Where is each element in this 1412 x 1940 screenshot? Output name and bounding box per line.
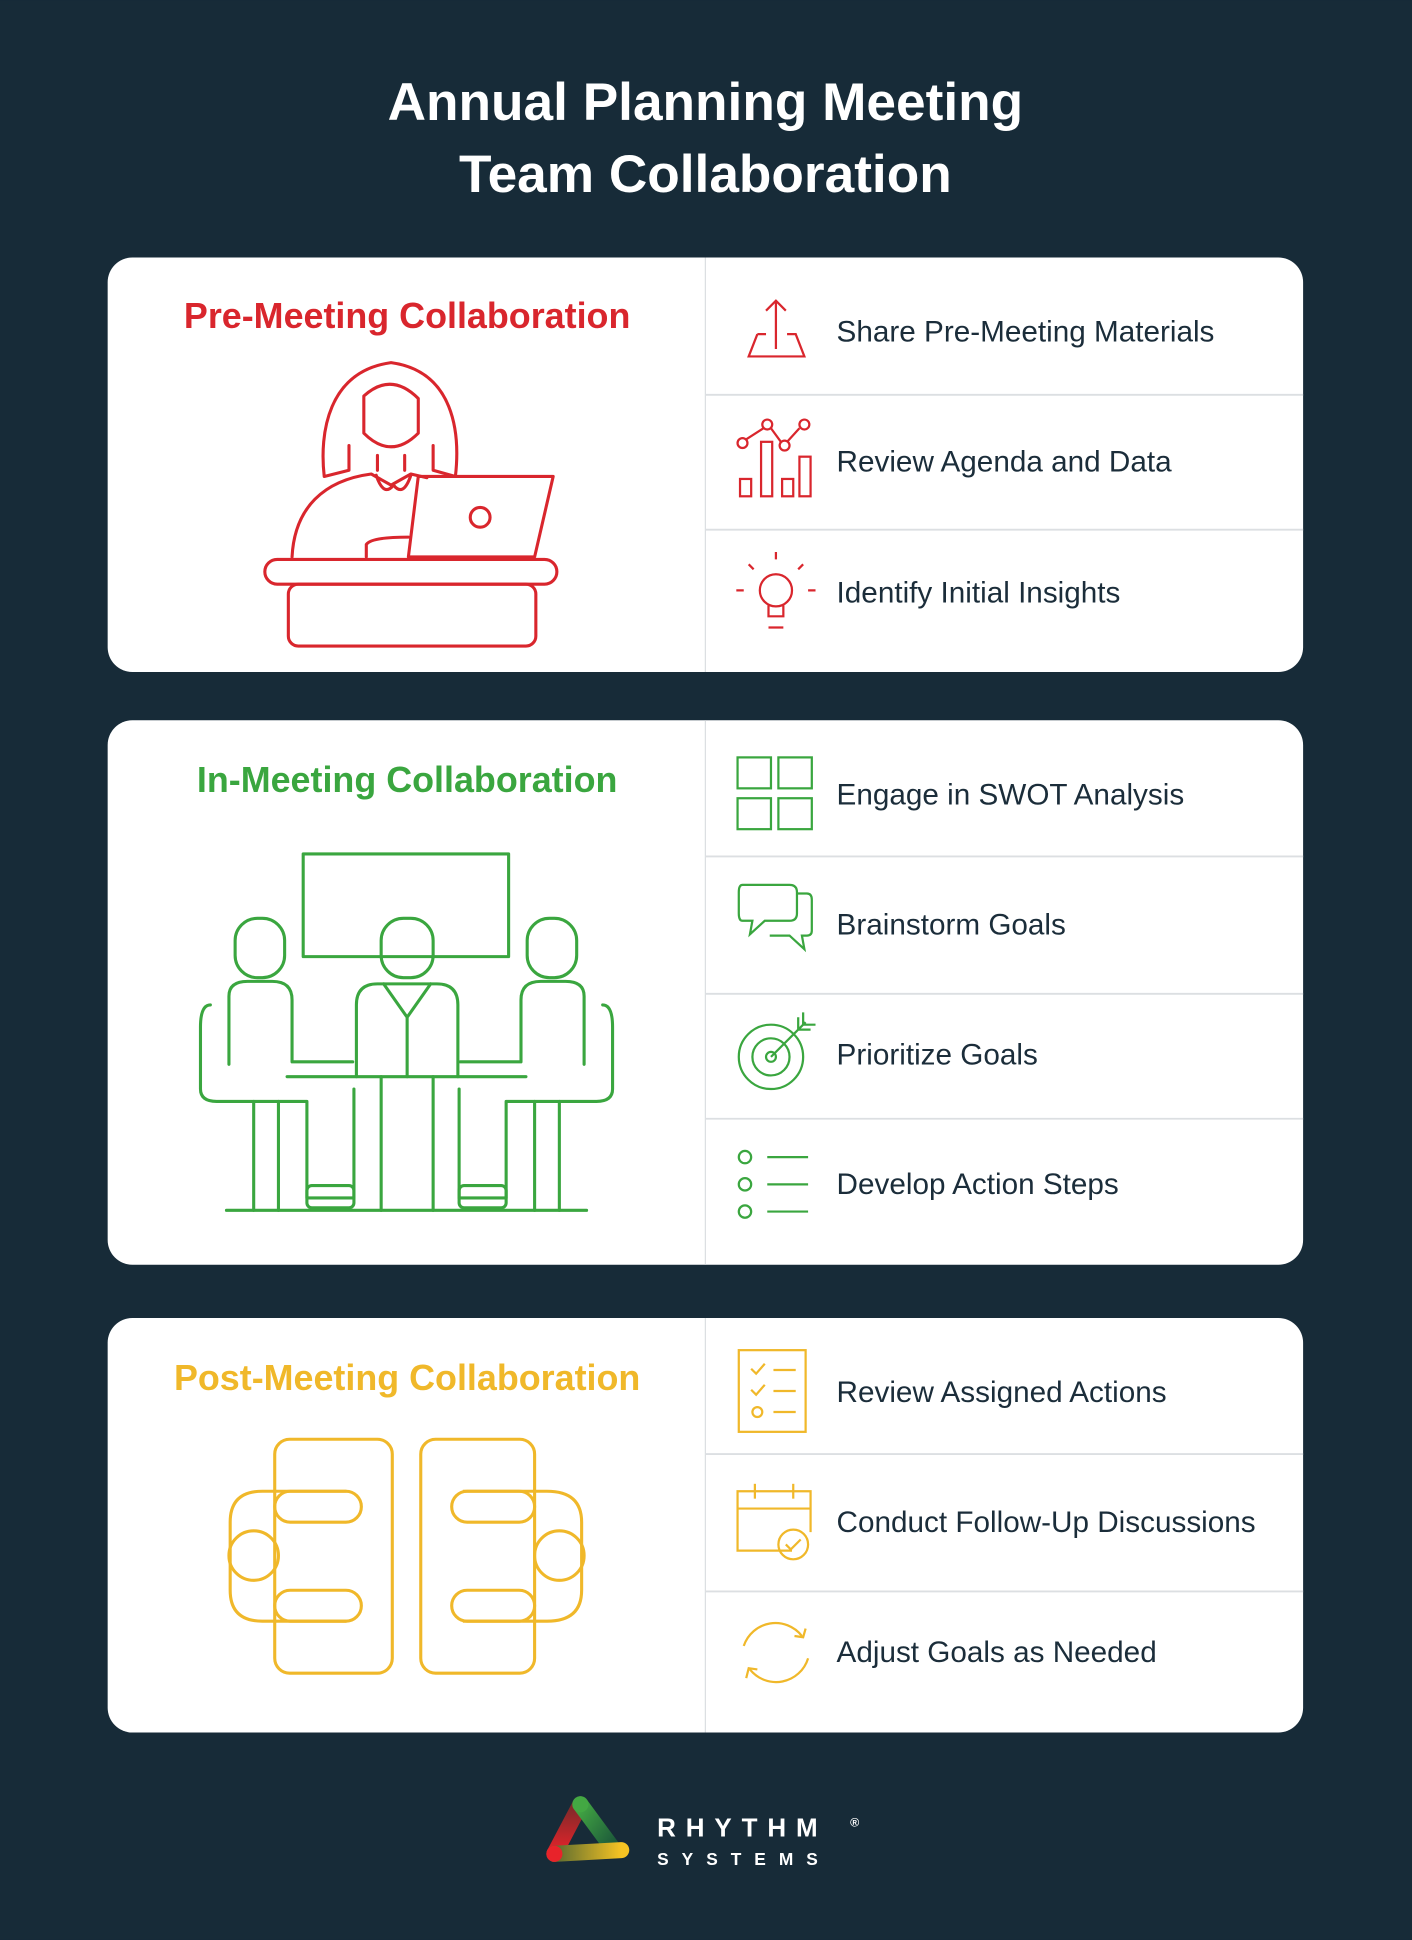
heading: post-meeting: Post-Meeting Collaboration [174,1358,640,1398]
item: action steps [739,1151,1119,1218]
item: follow-up [738,1484,1256,1559]
item: review actions: Review Assigned Actions [837,1376,1167,1409]
logo [546,1796,859,1869]
illustration: two devices / connection [229,1439,584,1673]
panel: pre-meeting [108,257,1303,672]
item: brainstorm: Brainstorm Goals [837,908,1066,941]
logo: RHYTHM [657,1813,828,1843]
heading: in-meeting: In-Meeting Collaboration [197,760,617,800]
item: adjust goals: Adjust Goals as Needed [837,1636,1157,1669]
item: action steps: Develop Action Steps [837,1168,1119,1201]
panel: in-meeting [108,720,1303,1265]
title: Team Collaboration [459,145,952,204]
heading: pre-meeting: Pre-Meeting Collaboration [184,296,630,336]
item: share materials: Share Pre-Meeting Materials [837,316,1214,349]
item: SWOT: Engage in SWOT Analysis [837,778,1184,811]
item: identify insights [736,552,1120,627]
title: Annual Planning Meeting [388,73,1023,132]
illustration: woman at laptop [265,363,557,646]
title [388,73,1023,204]
item: brainstorm [739,885,1066,949]
item: prioritize [739,1012,1038,1089]
panel: post-meeting [108,1318,1303,1733]
item: adjust goals [744,1623,1157,1682]
item: share materials [749,301,1214,356]
item: SWOT [738,757,1184,829]
item: review agenda: Review Agenda and Data [837,446,1172,479]
item: follow-up: Conduct Follow-Up Discussions [837,1506,1256,1539]
item: review actions [739,1350,1167,1432]
logo: SYSTEMS [657,1849,831,1869]
logo: ® [850,1816,859,1830]
illustration: meeting table [200,854,613,1210]
item: identify insights: Identify Initial Insights [837,577,1120,610]
item: prioritize: Prioritize Goals [837,1038,1038,1071]
item: review agenda [738,420,1172,496]
